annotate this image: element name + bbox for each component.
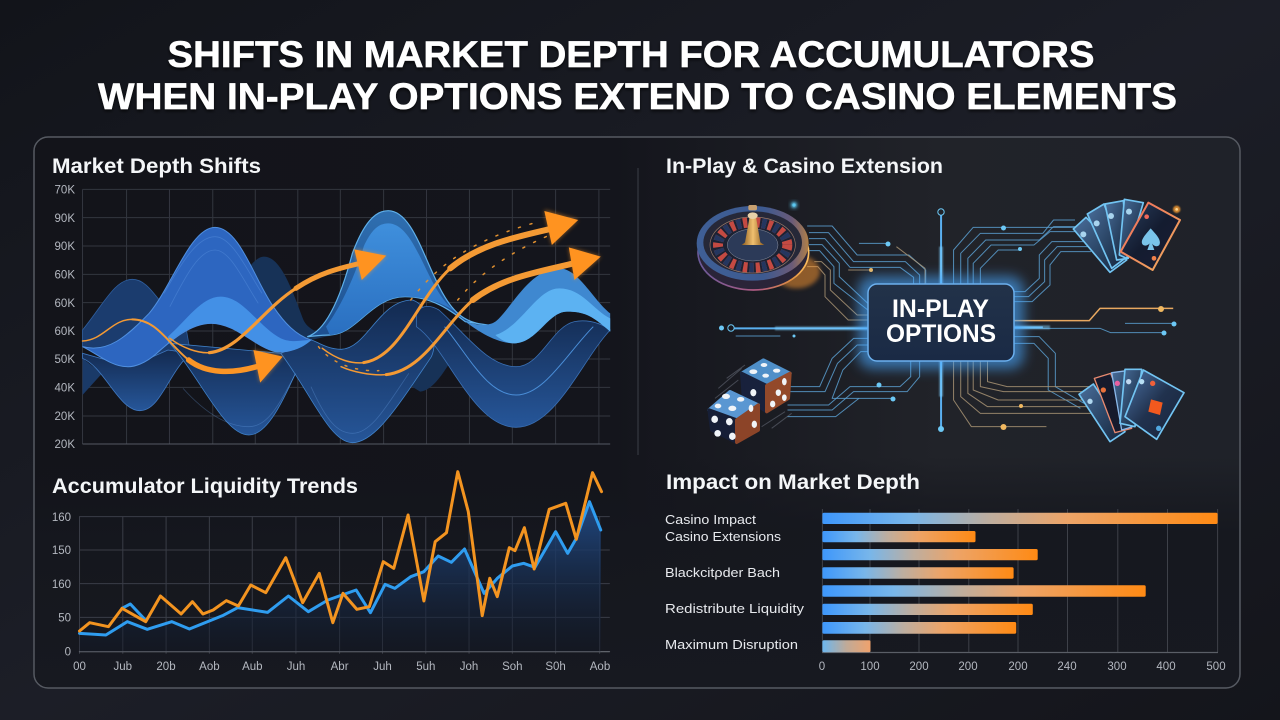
chart axis labels: market depth: 40K: [55, 382, 75, 394]
chart axis labels: market depth: 60K: [55, 298, 75, 310]
chart axis labels: market depth: 60K: [55, 270, 75, 282]
panel: impact on market depth: [665, 471, 1226, 673]
x axis labels: liquidity: Abr: [331, 661, 349, 673]
icon: roulette wheel: [697, 202, 820, 290]
center box: in-play options: [858, 276, 1024, 369]
x axis labels: liquidity: 20b: [156, 661, 176, 673]
x axis labels: liquidity: [73, 661, 610, 673]
x axis labels: liquidity: Jub: [114, 661, 132, 673]
heading: impact on market depth: Impact on Market Depth: [666, 471, 920, 494]
x axis labels: liquidity: Aob: [199, 661, 220, 673]
x axis labels: impact: 200: [1008, 661, 1028, 673]
chart axis labels: market depth: 90K: [55, 213, 75, 225]
chart axis labels: market depth: 50K: [55, 354, 75, 366]
x axis labels: liquidity: Aub: [242, 661, 263, 673]
arrows: orange trend flows: [83, 210, 601, 383]
chart axis labels: market depth: 60K: [55, 326, 75, 338]
panel: in-play and casino extension: [666, 155, 1184, 442]
wave chart: market depth: [83, 189, 610, 444]
line chart: liquidity trends: [80, 472, 609, 653]
title: WHEN IN-PLAY OPTIONS EXTEND TO CASINO ELEMENTS: [98, 76, 1177, 117]
icon: spade cards: [1073, 199, 1180, 272]
x axis labels: impact: 240: [1057, 661, 1077, 673]
title: [98, 34, 1177, 117]
heading: accumulator liquidity trends: Accumulator Liquidity Trends: [52, 475, 358, 498]
x axis labels: impact: 200: [909, 661, 929, 673]
chart axis labels: market depth: 20K: [55, 439, 75, 451]
x axis labels: impact: 400: [1156, 661, 1176, 673]
circuit lines: [734, 215, 1173, 428]
category labels: Casino Extensions: [665, 529, 782, 544]
x axis labels: liquidity: Soh: [502, 661, 523, 673]
y axis labels: liquidity: 0: [65, 646, 71, 658]
panel: dashboard frame: [34, 137, 1240, 688]
x axis labels: liquidity: Aob: [590, 661, 610, 673]
center box: in-play options: OPTIONS: [886, 320, 996, 348]
chart axis labels: market depth: 90K: [55, 241, 75, 253]
x axis labels: liquidity: S0h: [545, 661, 566, 673]
category labels: Maximum Disruption: [665, 637, 798, 652]
center box: in-play options: IN-PLAY: [892, 295, 989, 323]
x axis labels: impact: 500: [1206, 661, 1226, 673]
category labels: [665, 512, 805, 652]
category labels: Casino Impact: [665, 512, 756, 527]
x axis labels: liquidity: 00: [73, 661, 86, 673]
category labels: Redistribute Liquidity: [665, 601, 805, 616]
y axis labels: liquidity: 160: [52, 579, 71, 591]
heading: in-play and casino extension: In-Play & Casino Extension: [666, 155, 943, 178]
circuit nodes: [719, 202, 1176, 432]
icon: dice: [709, 360, 792, 442]
heading: market depth shifts: Market Depth Shifts: [52, 155, 261, 178]
x axis labels: impact: 300: [1107, 661, 1127, 673]
bar chart: impact: [822, 509, 1218, 652]
x axis labels: liquidity: Juh: [373, 661, 392, 673]
title: SHIFTS IN MARKET DEPTH FOR ACCUMULATORS: [168, 34, 1094, 75]
x axis labels: liquidity: 5uh: [416, 661, 435, 673]
category labels: Blackcitρder Bach: [665, 565, 780, 580]
x axis labels: impact: [819, 661, 1226, 673]
chart axis labels: market depth: 70K: [55, 184, 75, 196]
x axis labels: liquidity: Joh: [460, 661, 478, 673]
x axis labels: impact: 200: [958, 661, 978, 673]
x axis labels: impact: 0: [819, 661, 825, 673]
icon: diamond cards: [1079, 369, 1184, 442]
panel: accumulator liquidity trends: [52, 472, 610, 673]
y axis labels: liquidity: 150: [52, 545, 71, 557]
x axis labels: impact: 100: [860, 661, 880, 673]
y axis labels: liquidity: [52, 512, 71, 658]
panel: market depth shifts: [52, 155, 610, 451]
y axis labels: liquidity: 160: [52, 512, 71, 524]
chart axis labels: market depth: 20K: [55, 411, 75, 423]
x axis labels: liquidity: Juh: [287, 661, 305, 673]
chart axis labels: market depth: [55, 184, 75, 451]
y axis labels: liquidity: 50: [58, 612, 71, 624]
